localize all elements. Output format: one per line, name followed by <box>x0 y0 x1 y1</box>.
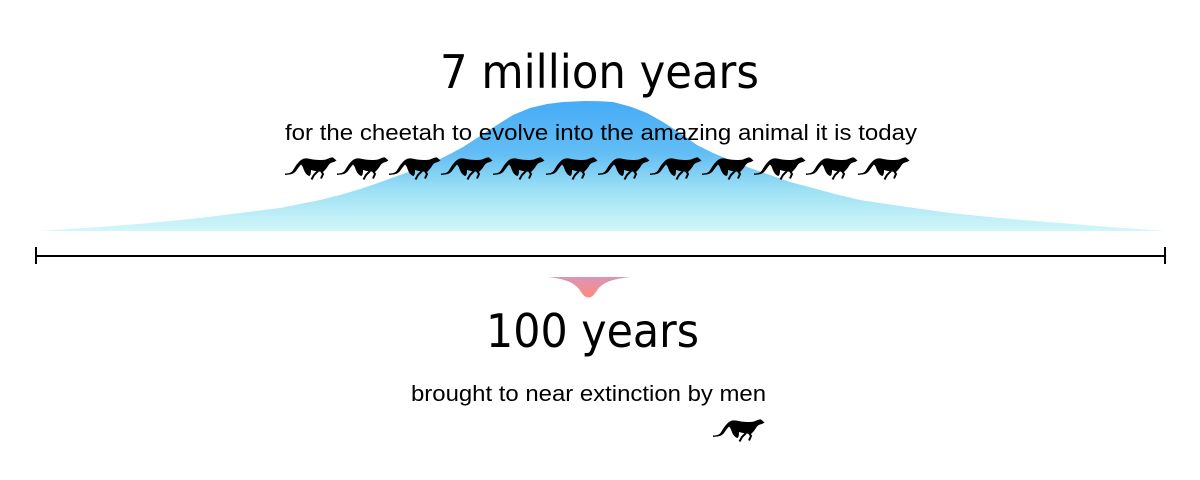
subtitle: cheetah evolution: for the cheetah to evolve into the amazing animal it is today <box>285 120 917 145</box>
pink inverted curve: 100 years <box>548 277 631 298</box>
blue bell curve: 7 million years <box>40 101 1165 231</box>
row of twelve cheetah icons <box>285 157 910 180</box>
title: 100 years: 100 years <box>486 304 699 358</box>
subtitle: near extinction: brought to near extinction by men <box>411 381 766 406</box>
title: 7 million years: 7 million years <box>440 45 759 99</box>
timeline axis with end ticks <box>36 247 1165 264</box>
single cheetah icon <box>713 419 764 442</box>
